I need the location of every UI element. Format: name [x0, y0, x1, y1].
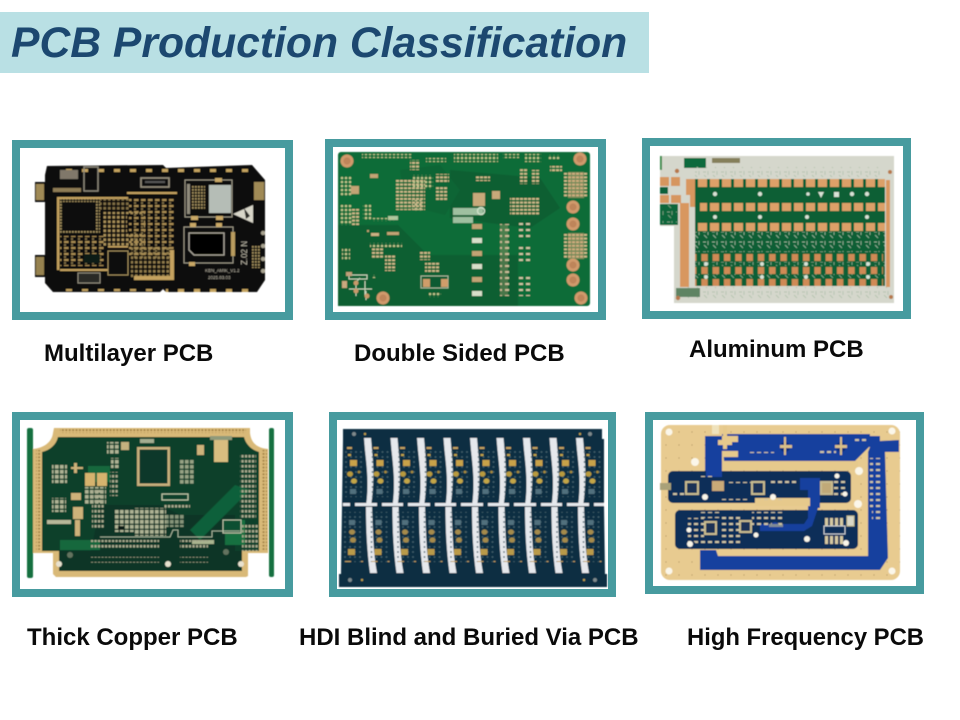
frame: Double Sided PCB: [325, 139, 606, 320]
label: Multilayer PCB: Multilayer PCB: [44, 340, 213, 367]
panel: Thick Copper PCB: [12, 412, 293, 651]
panel: HDI Blind and Buried Via PCB: [299, 412, 639, 651]
circuit board: thick copper: [27, 428, 274, 578]
frame: High Frequency PCB: [645, 412, 924, 594]
panel: High Frequency PCB: [645, 412, 924, 651]
frame: Aluminum PCB: [642, 138, 911, 319]
title banner: PCB Production Classification: [11, 19, 627, 67]
circuit board: black multilayer: [35, 165, 265, 292]
circuit board: black multilayer: KBN_AMIK_V1.2: [205, 268, 240, 273]
panel: Double Sided PCB: [325, 139, 606, 367]
circuit board: aluminum panel: [660, 156, 894, 303]
circuit board: HDI panel: [339, 429, 607, 587]
frame: Thick Copper PCB: [12, 412, 293, 597]
circuit board: black multilayer: Z.02 N: [240, 241, 249, 265]
circuit board: black multilayer: 2025.03.03: [208, 275, 231, 280]
label: HDI Blind and Buried Via PCB: HDI Blind and Buried Via PCB: [299, 624, 639, 651]
frame: HDI Blind and Buried Via PCB: [329, 412, 616, 597]
panel: Aluminum PCB: [642, 138, 911, 363]
label: Thick Copper PCB: Thick Copper PCB: [27, 624, 238, 651]
circuit board: green double sided: [338, 152, 590, 306]
label: Double Sided PCB: Double Sided PCB: [354, 340, 565, 367]
frame: Multilayer PCB: [12, 140, 293, 320]
label: High Frequency PCB: High Frequency PCB: [687, 624, 924, 651]
panel: Multilayer PCB: [12, 140, 293, 367]
label: Aluminum PCB: Aluminum PCB: [689, 336, 864, 363]
circuit board: high frequency: [660, 425, 900, 580]
